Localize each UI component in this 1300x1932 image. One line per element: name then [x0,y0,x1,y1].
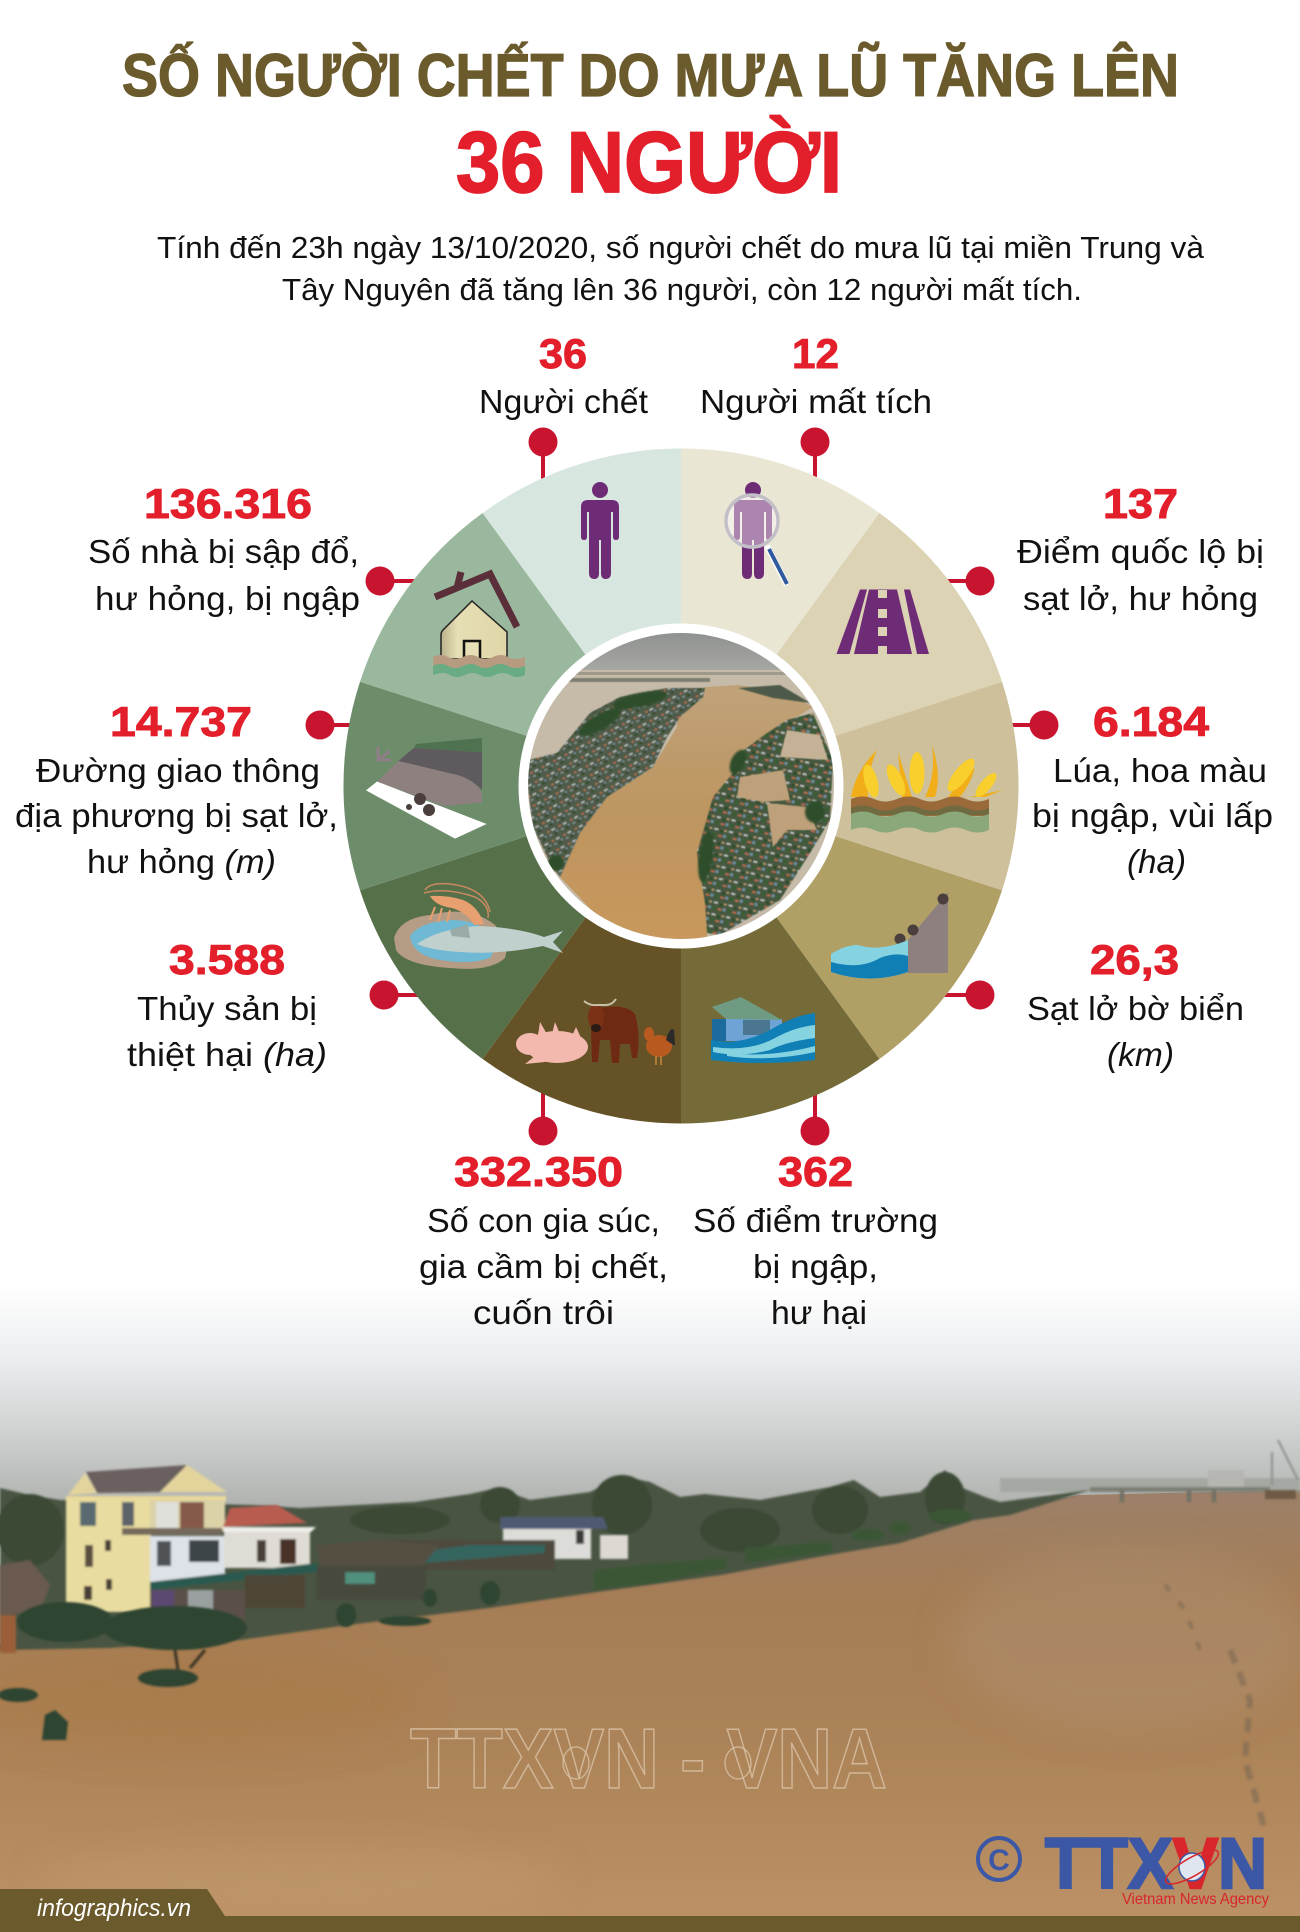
intro text: Tây Nguyên đã tăng lên 36 người, còn 12 người mất tích. [282,272,1082,307]
label: coast: Sạt lở bờ biển [1027,990,1244,1027]
label: national roads: sạt lở, hư hỏng [1023,580,1258,617]
icon: dead livestock [516,999,675,1065]
aerial river [560,685,813,940]
photo tree line [0,1470,1090,1650]
label: schools [693,1148,938,1331]
label: missing: 12 [792,330,839,377]
label: local roads: 14.737 [110,698,252,745]
wedge: coast erosion [681,786,1002,1059]
connector lines and dots [306,428,1058,1146]
aerial sky [579,633,783,672]
icon: person with magnifier [726,482,787,585]
photo water tones [0,1550,1300,1910]
photo river water [0,1490,1300,1932]
headline number: 36 NGƯỜI [456,115,842,211]
copyright mark [978,1838,1020,1880]
icon: road [836,590,929,654]
copyright mark: C [988,1844,1010,1877]
wedge: local roads [343,682,681,890]
label: livestock: 332.350 [454,1148,623,1195]
label: national roads [1017,480,1264,617]
cow [584,999,639,1063]
label: aquaculture: thiệt hại (ha) [127,1036,327,1073]
label: coast [1027,936,1244,1073]
wedge: rice [681,682,1019,890]
label: aquaculture: 3.588 [169,936,285,983]
aerial dark trees [548,687,825,883]
intro text [157,230,1205,307]
label: coast: (km) [1107,1036,1174,1073]
wheel chart [343,448,1019,1124]
label: national roads: 137 [1103,480,1178,527]
wedge: livestock [483,786,681,1124]
icon: coast erosion [831,892,948,978]
aerial far island [738,685,810,703]
icon: person [581,482,619,579]
icon: fish and shrimp [394,884,563,969]
wedge: missing people [681,448,879,786]
label: aquaculture [127,936,327,1073]
label: houses [88,480,360,617]
label: deaths: 36 [539,330,587,377]
logo wordmark: TTXVN [1045,1825,1267,1904]
label: houses: hư hỏng, bị ngập [95,580,360,617]
label: schools: bị ngập, [753,1248,878,1285]
wedge: national roads [681,513,1002,786]
label: local roads: Đường giao thông [36,752,320,789]
footer bar [0,1889,1300,1932]
watermark TTXVN - VNA: TTXVN - VNA [410,1712,887,1807]
label: deaths [479,330,648,420]
photo debris line on water [1165,1585,1265,1830]
icon: flooded rice [851,745,1003,832]
logo globe [1162,1844,1222,1890]
aerial flooded plain [520,670,850,940]
photo yellow building [0,1465,375,1653]
label: rice: 6.184 [1093,698,1210,745]
photo white house with blue roof [316,1517,628,1600]
intro text: Tính đến 23h ngày 13/10/2020, số người chết do mưa lũ tại miền Trung và [157,230,1205,265]
photo flooded trees [0,1581,500,1740]
label: missing [700,330,932,420]
label: livestock [419,1148,668,1331]
bottom photo: flooded street [0,1285,1300,1932]
label: aquaculture: Thủy sản bị [137,990,317,1027]
label: houses: Số nhà bị sập đổ, [88,533,359,570]
label: schools: hư hại [771,1294,867,1331]
fish [417,926,563,953]
label: deaths: Người chết [479,383,648,420]
TTXVN logo [978,1825,1269,1908]
wedge: schools [681,786,879,1124]
label: coast: 26,3 [1090,936,1179,983]
label: missing: Người mất tích [700,383,932,420]
wedge: houses [360,513,681,786]
label: schools: Số điểm trường [693,1202,938,1239]
label: livestock: Số con gia súc, [427,1202,660,1239]
shrimp [424,884,490,925]
icon: road landslide [366,738,487,839]
label: rice: Lúa, hoa màu [1053,752,1267,789]
label: local roads [15,698,338,880]
label: livestock: gia cầm bị chết, [419,1248,668,1285]
chicken [644,1027,675,1065]
footer site name: infographics.vn [37,1895,191,1922]
photo sky fading from white [0,1285,1300,1520]
title: SỐ NGƯỜI CHẾT DO MƯA LŨ TĂNG LÊN [122,42,1179,109]
label: rice: (ha) [1127,843,1186,880]
icon: damaged house [433,572,525,677]
pig [516,1022,588,1064]
aerial right village [697,713,833,935]
label: houses: 136.316 [144,480,312,527]
label: schools: 362 [778,1148,853,1195]
photo distant shore and bridge [1000,1440,1300,1502]
label: national roads: Điểm quốc lộ bị [1017,533,1264,570]
wedge: aquaculture [360,786,681,1059]
label: livestock: cuốn trôi [473,1294,614,1331]
label: rice: bị ngập, vùi lấp [1032,797,1273,834]
icon: flooded school [711,997,815,1063]
label: local roads: hư hỏng (m) [87,843,276,880]
center photo: aerial flood [518,624,850,948]
label: local roads: địa phương bị sạt lở, [15,797,338,834]
logo tagline: Vietnam News Agency [1122,1891,1269,1908]
label: rice [1032,698,1273,880]
wedge: deaths [483,448,681,786]
aerial left village [528,688,705,877]
photo riverside bushes [594,1509,971,1590]
aerial flooded fields [737,730,828,847]
